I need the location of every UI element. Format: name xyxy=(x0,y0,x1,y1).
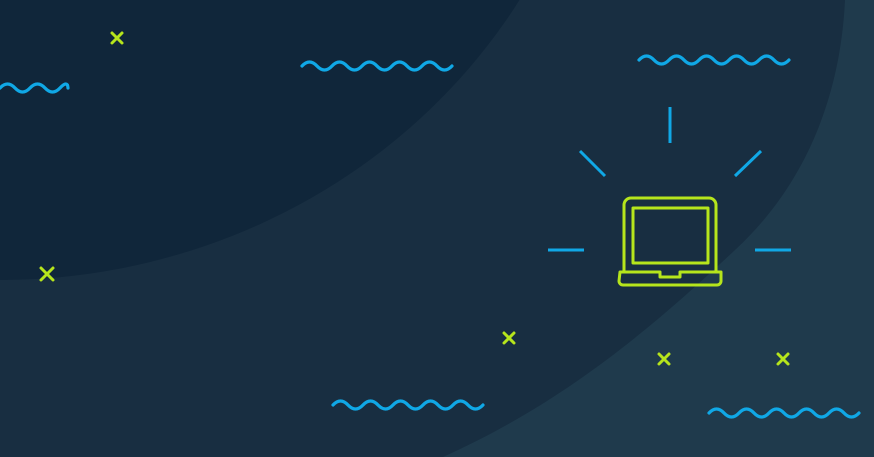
icon: laptop xyxy=(619,198,721,285)
waves xyxy=(0,56,859,417)
x marks xyxy=(41,33,788,364)
icon: light rays xyxy=(548,107,791,250)
